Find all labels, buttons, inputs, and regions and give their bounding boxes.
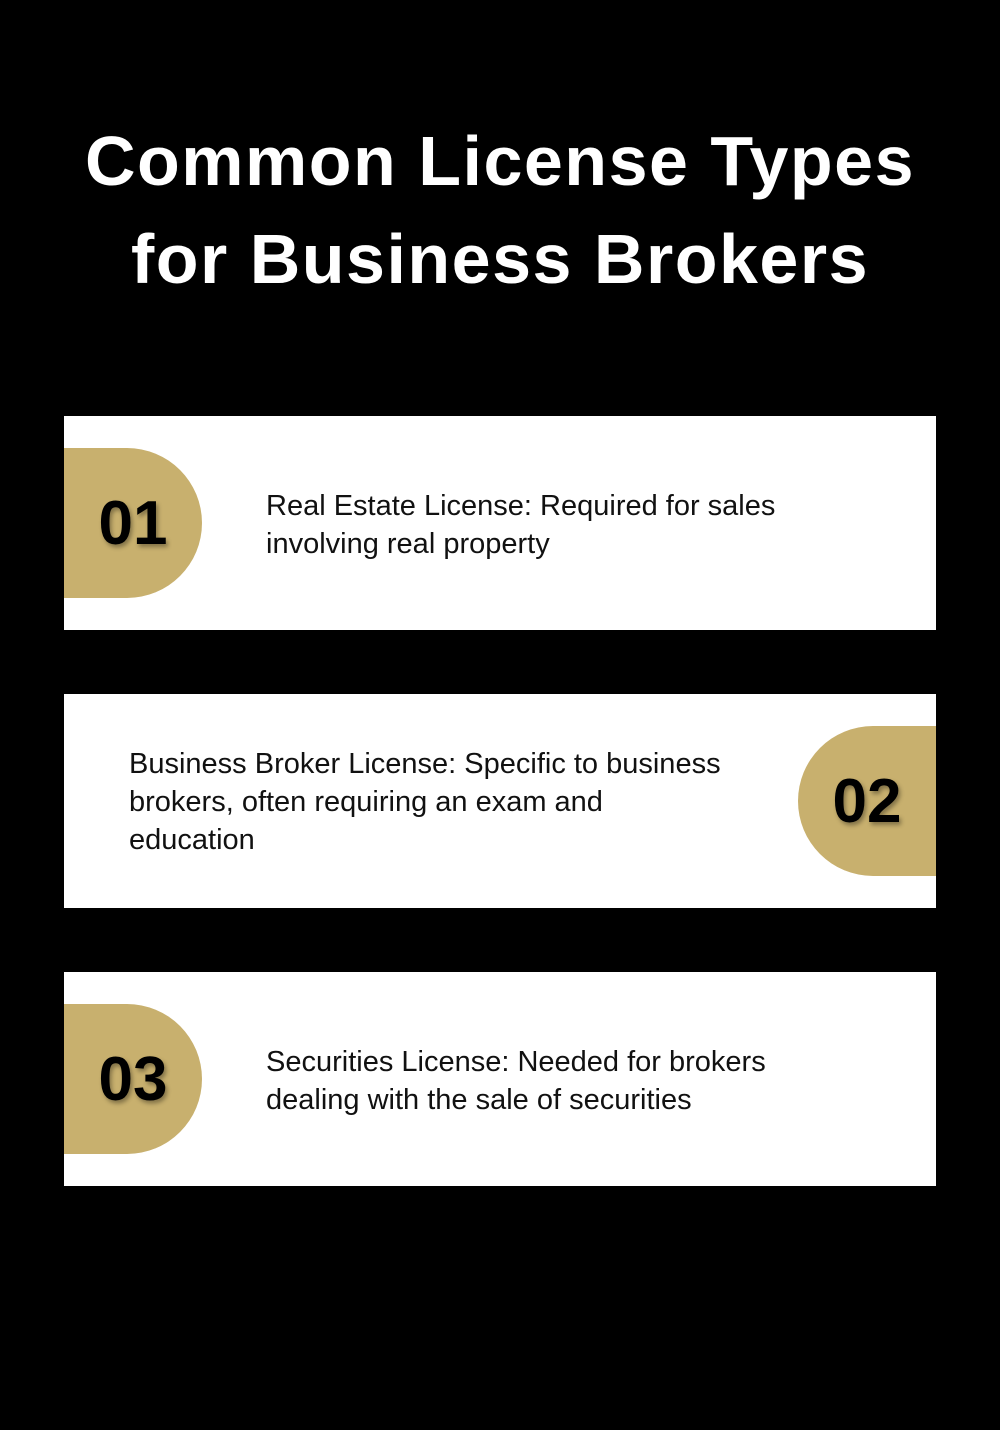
- badge 02: [798, 726, 936, 876]
- text 02: Business Broker License: Specific to business brokers, often requiring an exam and: [129, 748, 721, 818]
- badge 01: [64, 448, 202, 598]
- text 03: Securities License: Needed for brokers: [266, 1046, 766, 1078]
- badge 01: 01: [99, 488, 167, 558]
- text 02: education: [129, 824, 255, 856]
- text 03: dealing with the sale of securities: [266, 1084, 692, 1116]
- badge 03: 03: [99, 1044, 167, 1114]
- panel: card 01: [64, 416, 936, 630]
- text 02: [129, 748, 721, 856]
- panel: card 03: [64, 972, 936, 1186]
- title: Common License Types: [85, 122, 915, 200]
- title: [85, 122, 915, 298]
- title: for Business Brokers: [131, 220, 869, 298]
- badge 02: 02: [833, 766, 901, 836]
- badge 03: [64, 1004, 202, 1154]
- text 01: Real Estate License: Required for sales involving real property: [266, 490, 775, 560]
- panel: card 02: [64, 694, 936, 908]
- text 03: [266, 1046, 766, 1116]
